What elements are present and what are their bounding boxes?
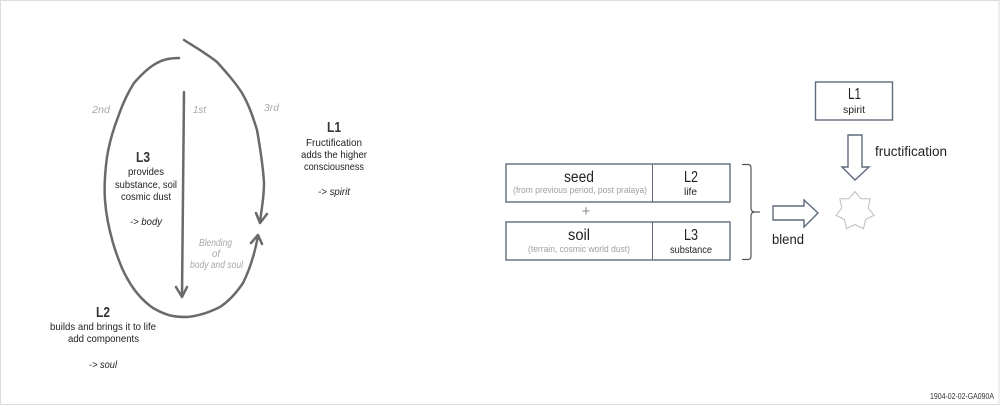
arrow: 3rd curve from the top to the blending point (184, 40, 267, 223)
bracket (742, 164, 760, 260)
text block: L2: add components (68, 333, 139, 345)
panel: soil box: L3 (684, 227, 698, 244)
panel: cycle diagram (50, 40, 367, 371)
panel: L1 spirit box (816, 82, 892, 120)
panel: soil box: substance (670, 244, 712, 256)
panel: seed box: life (684, 186, 697, 198)
panel: soil box: (terrain, cosmic world dust) (528, 244, 630, 255)
text block: L2: L2 (96, 305, 110, 321)
plus sign: + (582, 203, 591, 220)
text block: L2 (50, 305, 156, 371)
text block: blending of body and soul (190, 237, 244, 271)
text block: L1 (301, 120, 367, 198)
panel: seed box: L2 (684, 169, 698, 186)
panel: L1 spirit box: spirit (843, 104, 865, 116)
label: fructification: fructification (875, 144, 947, 159)
label: 3rd: 3rd (264, 102, 280, 114)
text block: L3: provides (128, 166, 164, 178)
icon: seven-pointed star (836, 192, 874, 229)
text block: L2: builds and brings it to life (50, 321, 156, 333)
text block: L1: consciousness (304, 161, 364, 173)
label: 1st: 1st (193, 104, 207, 116)
text block: L3: L3 (136, 150, 150, 166)
arrow: 2nd curve from top round to the bottom (105, 58, 262, 317)
text block: blending of body and soul: of (212, 248, 221, 260)
text block: L3: substance, soil (115, 179, 177, 191)
text block: L3: cosmic dust (121, 191, 171, 203)
panel: L1 spirit box: L1 (848, 86, 861, 103)
arrow: fructification (842, 135, 869, 180)
arrow: blend (773, 200, 818, 227)
text block: blending of body and soul: body and soul (190, 259, 244, 271)
text block: L1: adds the higher (301, 149, 367, 161)
text block: L3 (115, 150, 177, 228)
panel: seed box: seed (564, 169, 594, 186)
text block: blending of body and soul: Blending (199, 237, 232, 249)
arrow: 1st straight line downward (176, 92, 187, 297)
label: 2nd: 2nd (91, 104, 111, 116)
text block: L3: -> body (130, 216, 163, 228)
panel: seed box: (from previous period, post pralaya) (513, 185, 647, 196)
panel: soil box: soil (568, 227, 590, 244)
label: blend: blend (772, 232, 804, 247)
text block: L1: Fructification (306, 137, 362, 149)
text block: L1: L1 (327, 120, 341, 136)
panel: seed box (506, 164, 730, 202)
panel: soil box (506, 222, 730, 260)
text block: L1: -> spirit (318, 186, 351, 198)
text block: L2: -> soul (89, 359, 118, 371)
